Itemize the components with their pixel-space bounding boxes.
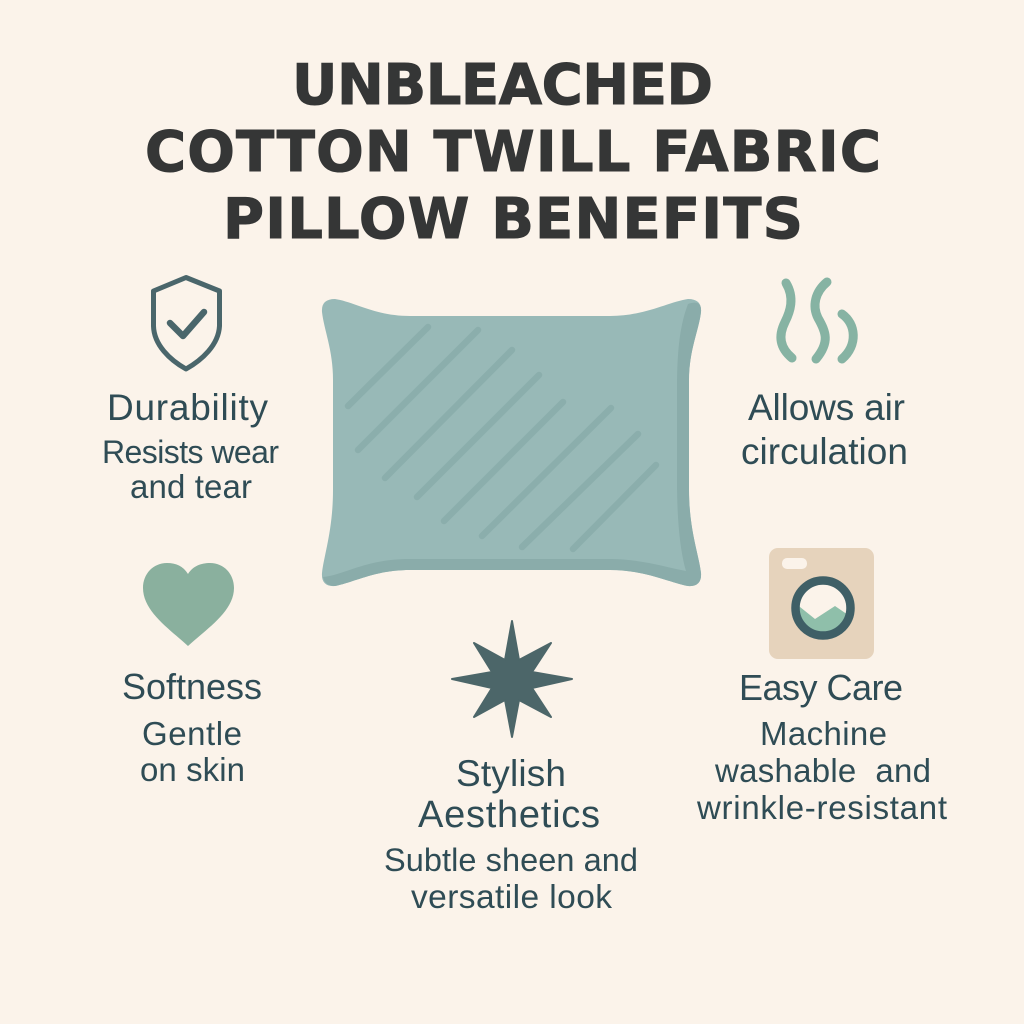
illustration: pillow: [322, 299, 701, 586]
title: [145, 53, 881, 252]
label: durability: and tear: [130, 468, 252, 505]
label: easy care: wrinkle-resistant: [696, 789, 947, 826]
icon: air waves: [781, 282, 853, 359]
icon: star: [452, 621, 572, 737]
label: easy care: washable and: [714, 752, 931, 789]
label: air circulation: circulation: [741, 431, 908, 472]
title: UNBLEACHED: [292, 53, 713, 118]
label: stylish aesthetics: Aesthetics: [418, 794, 600, 836]
label: durability: [102, 387, 279, 505]
label: stylish aesthetics: Stylish: [456, 753, 566, 794]
label: stylish aesthetics: [384, 753, 638, 916]
label: softness: Softness: [122, 666, 262, 707]
title: COTTON TWILL FABRIC: [145, 120, 881, 185]
label: durability: Resists wear: [102, 434, 279, 470]
label: air circulation: [741, 387, 908, 472]
icon: shield: [154, 278, 220, 369]
label: easy care: Easy Care: [739, 667, 903, 708]
label: easy care: Machine: [760, 715, 887, 752]
label: stylish aesthetics: Subtle sheen and: [384, 842, 638, 878]
label: easy care: [696, 667, 947, 826]
icon: heart: [143, 563, 234, 646]
icon: washing machine: [769, 548, 874, 659]
label: stylish aesthetics: versatile look: [411, 879, 612, 916]
label: softness: [122, 666, 262, 788]
label: softness: on skin: [140, 751, 245, 788]
label: air circulation: Allows air: [748, 387, 905, 428]
title: PILLOW BENEFITS: [223, 187, 803, 252]
label: durability: Durability: [107, 387, 268, 428]
label: softness: Gentle: [142, 715, 242, 752]
